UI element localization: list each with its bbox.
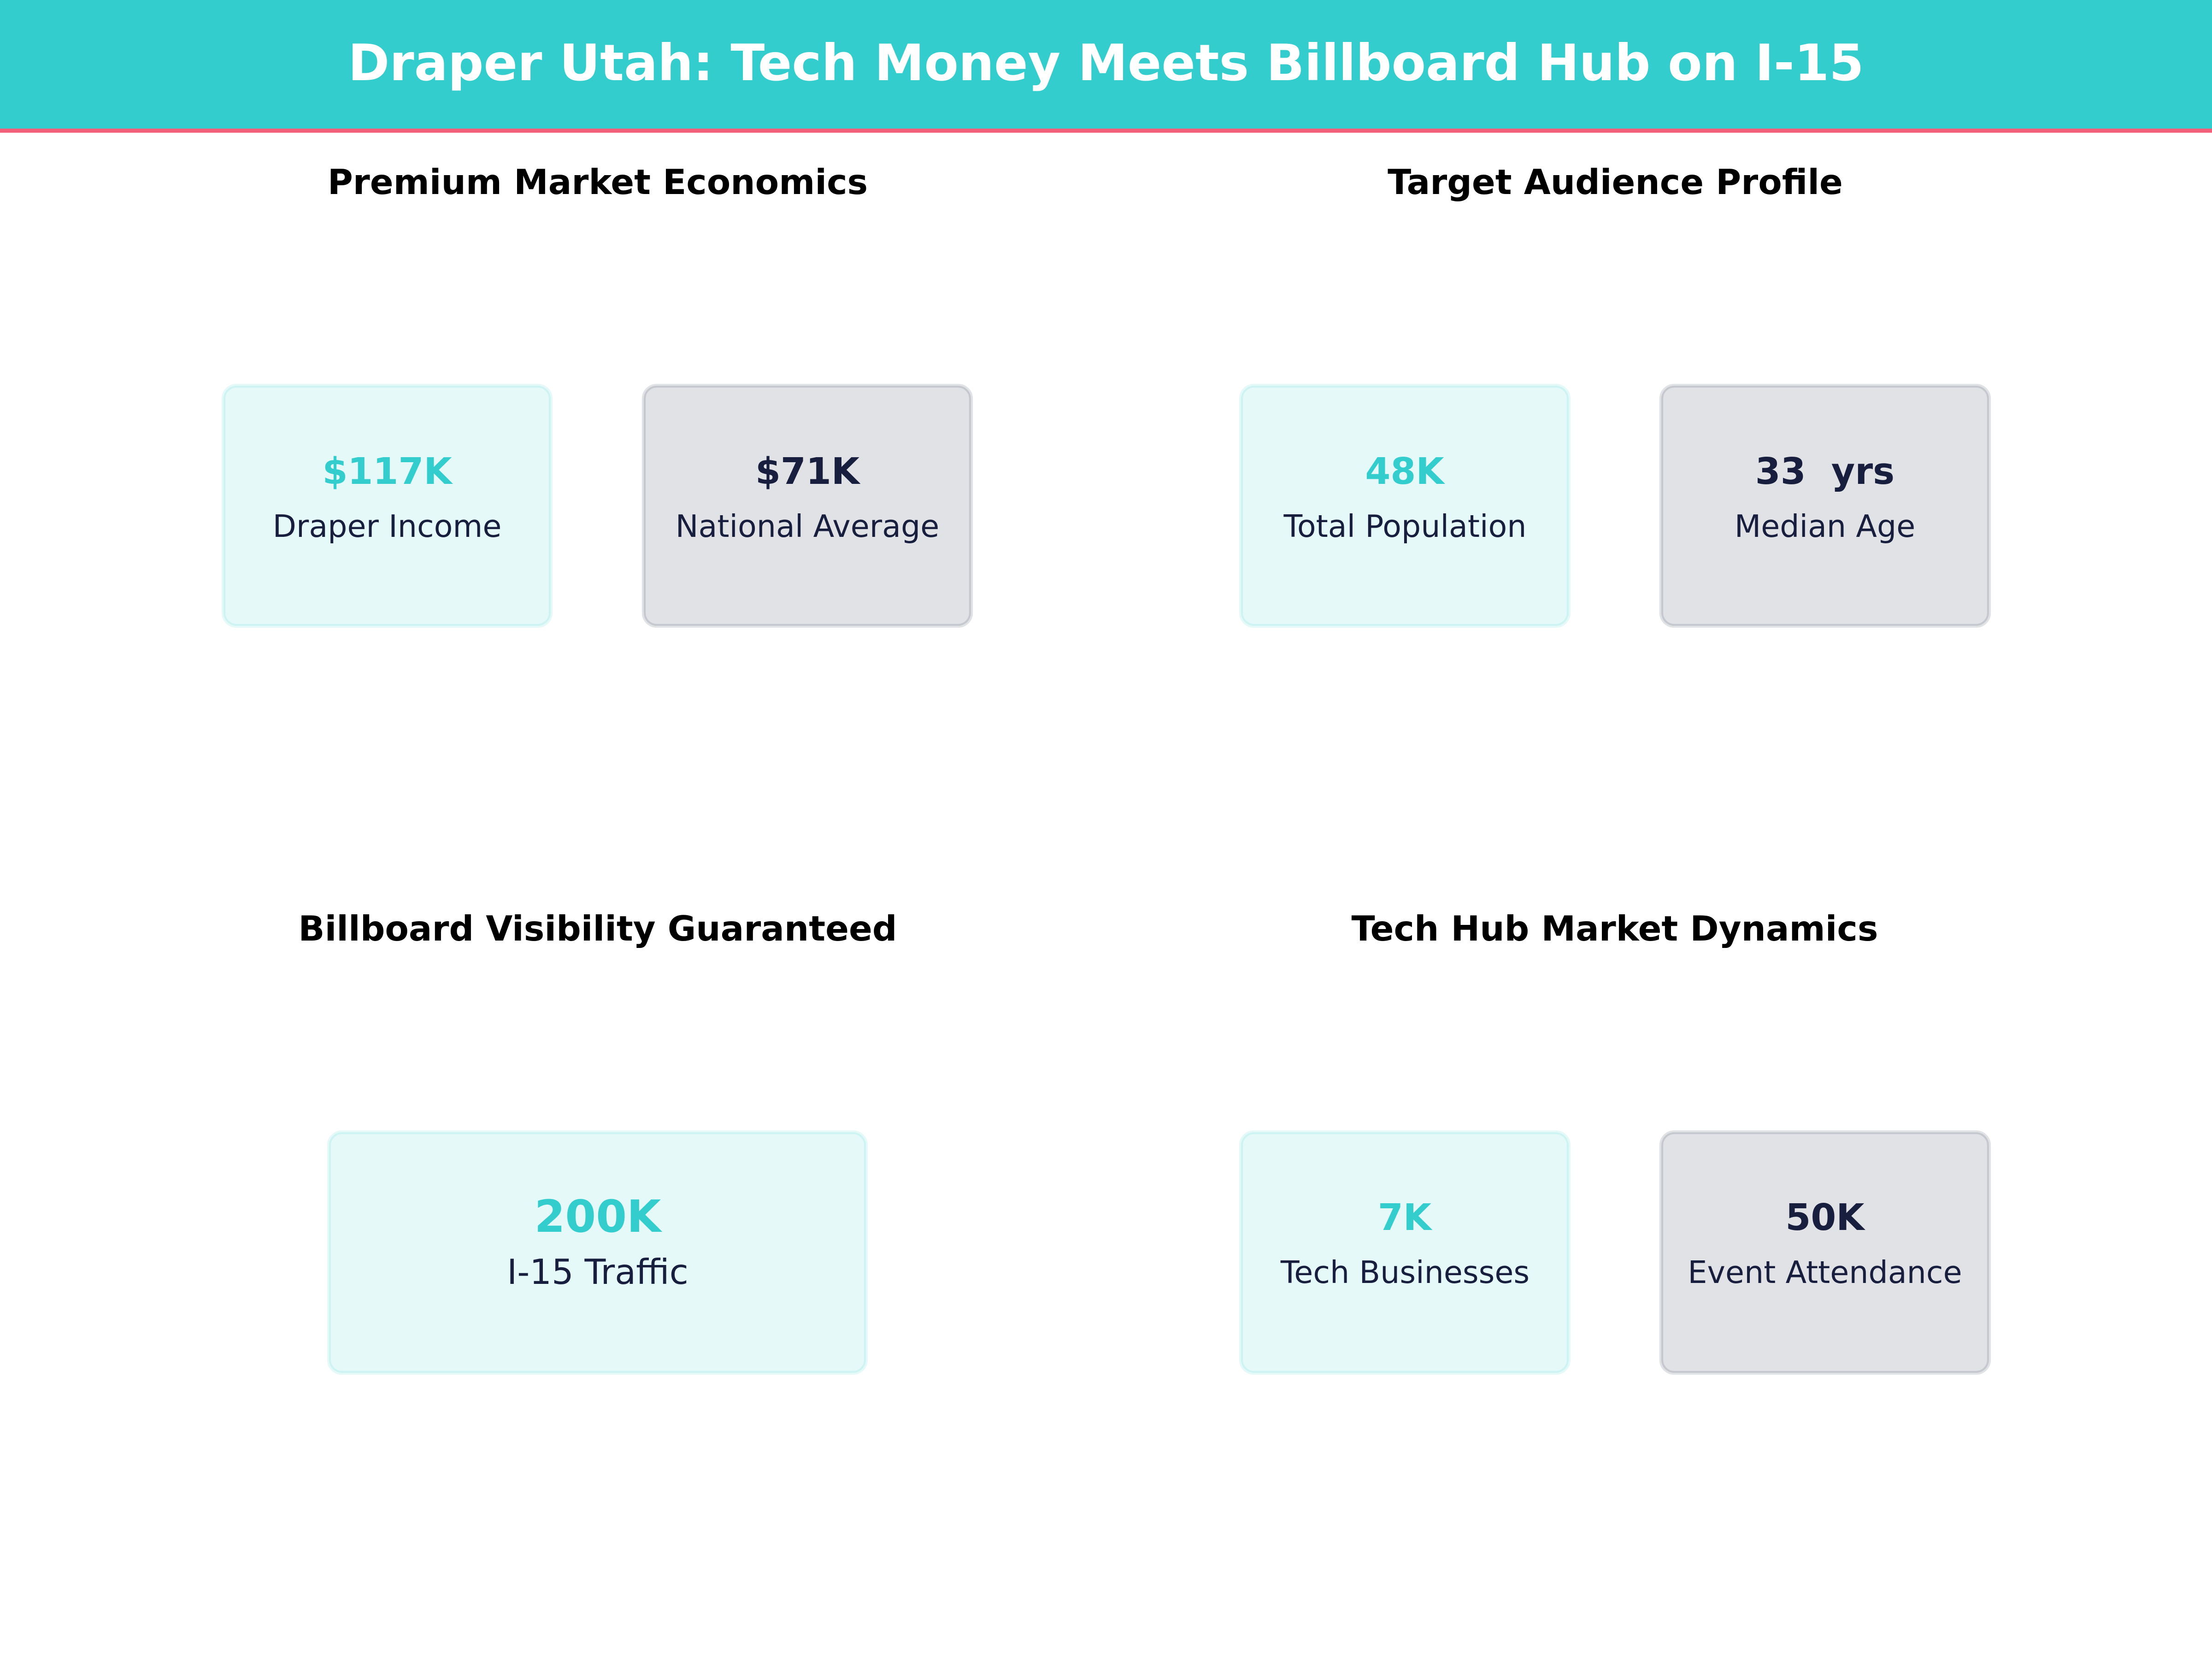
card: event attendance [1661, 1132, 1989, 1373]
card: national average [644, 386, 971, 626]
card: national average: National Average [676, 508, 939, 544]
card: median age: 33 yrs [1755, 450, 1894, 493]
heading: premium market economics: Premium Market Economics [328, 162, 868, 202]
header banner [0, 0, 2212, 133]
heading: target audience profile: Target Audience Profile [1388, 162, 1843, 202]
card: event attendance: 50K [1785, 1196, 1865, 1239]
card: tech businesses: Tech Businesses [1280, 1254, 1530, 1290]
panel: premium market economics [224, 162, 971, 626]
panel: tech hub market dynamics [1241, 908, 1989, 1373]
card: national average: $71K [755, 450, 861, 493]
card: tech businesses [1241, 1132, 1569, 1373]
card: total population: 48K [1365, 450, 1445, 493]
card: i-15 traffic: 200K [535, 1191, 663, 1242]
heading: tech hub market dynamics: Tech Hub Market Dynamics [1351, 908, 1878, 949]
card: draper income: $117K [322, 450, 453, 493]
card: total population [1241, 386, 1569, 626]
heading: billboard visibility guaranteed: Billboard Visibility Guaranteed [298, 908, 897, 949]
card: tech businesses: 7K [1378, 1196, 1433, 1239]
panel: target audience profile [1241, 162, 1989, 626]
card: i-15 traffic: I-15 Traffic [507, 1252, 688, 1292]
card: draper income [224, 386, 551, 626]
card: i-15 traffic [329, 1132, 866, 1373]
card: draper income: Draper Income [273, 508, 501, 544]
title: Draper Utah: Tech Money Meets Billboard Hub on I-15 [348, 34, 1864, 92]
card: median age [1661, 386, 1989, 626]
card: event attendance: Event Attendance [1688, 1254, 1962, 1290]
card: total population: Total Population [1283, 508, 1527, 544]
panel: billboard visibility guaranteed [298, 908, 897, 1373]
card: median age: Median Age [1735, 508, 1915, 544]
